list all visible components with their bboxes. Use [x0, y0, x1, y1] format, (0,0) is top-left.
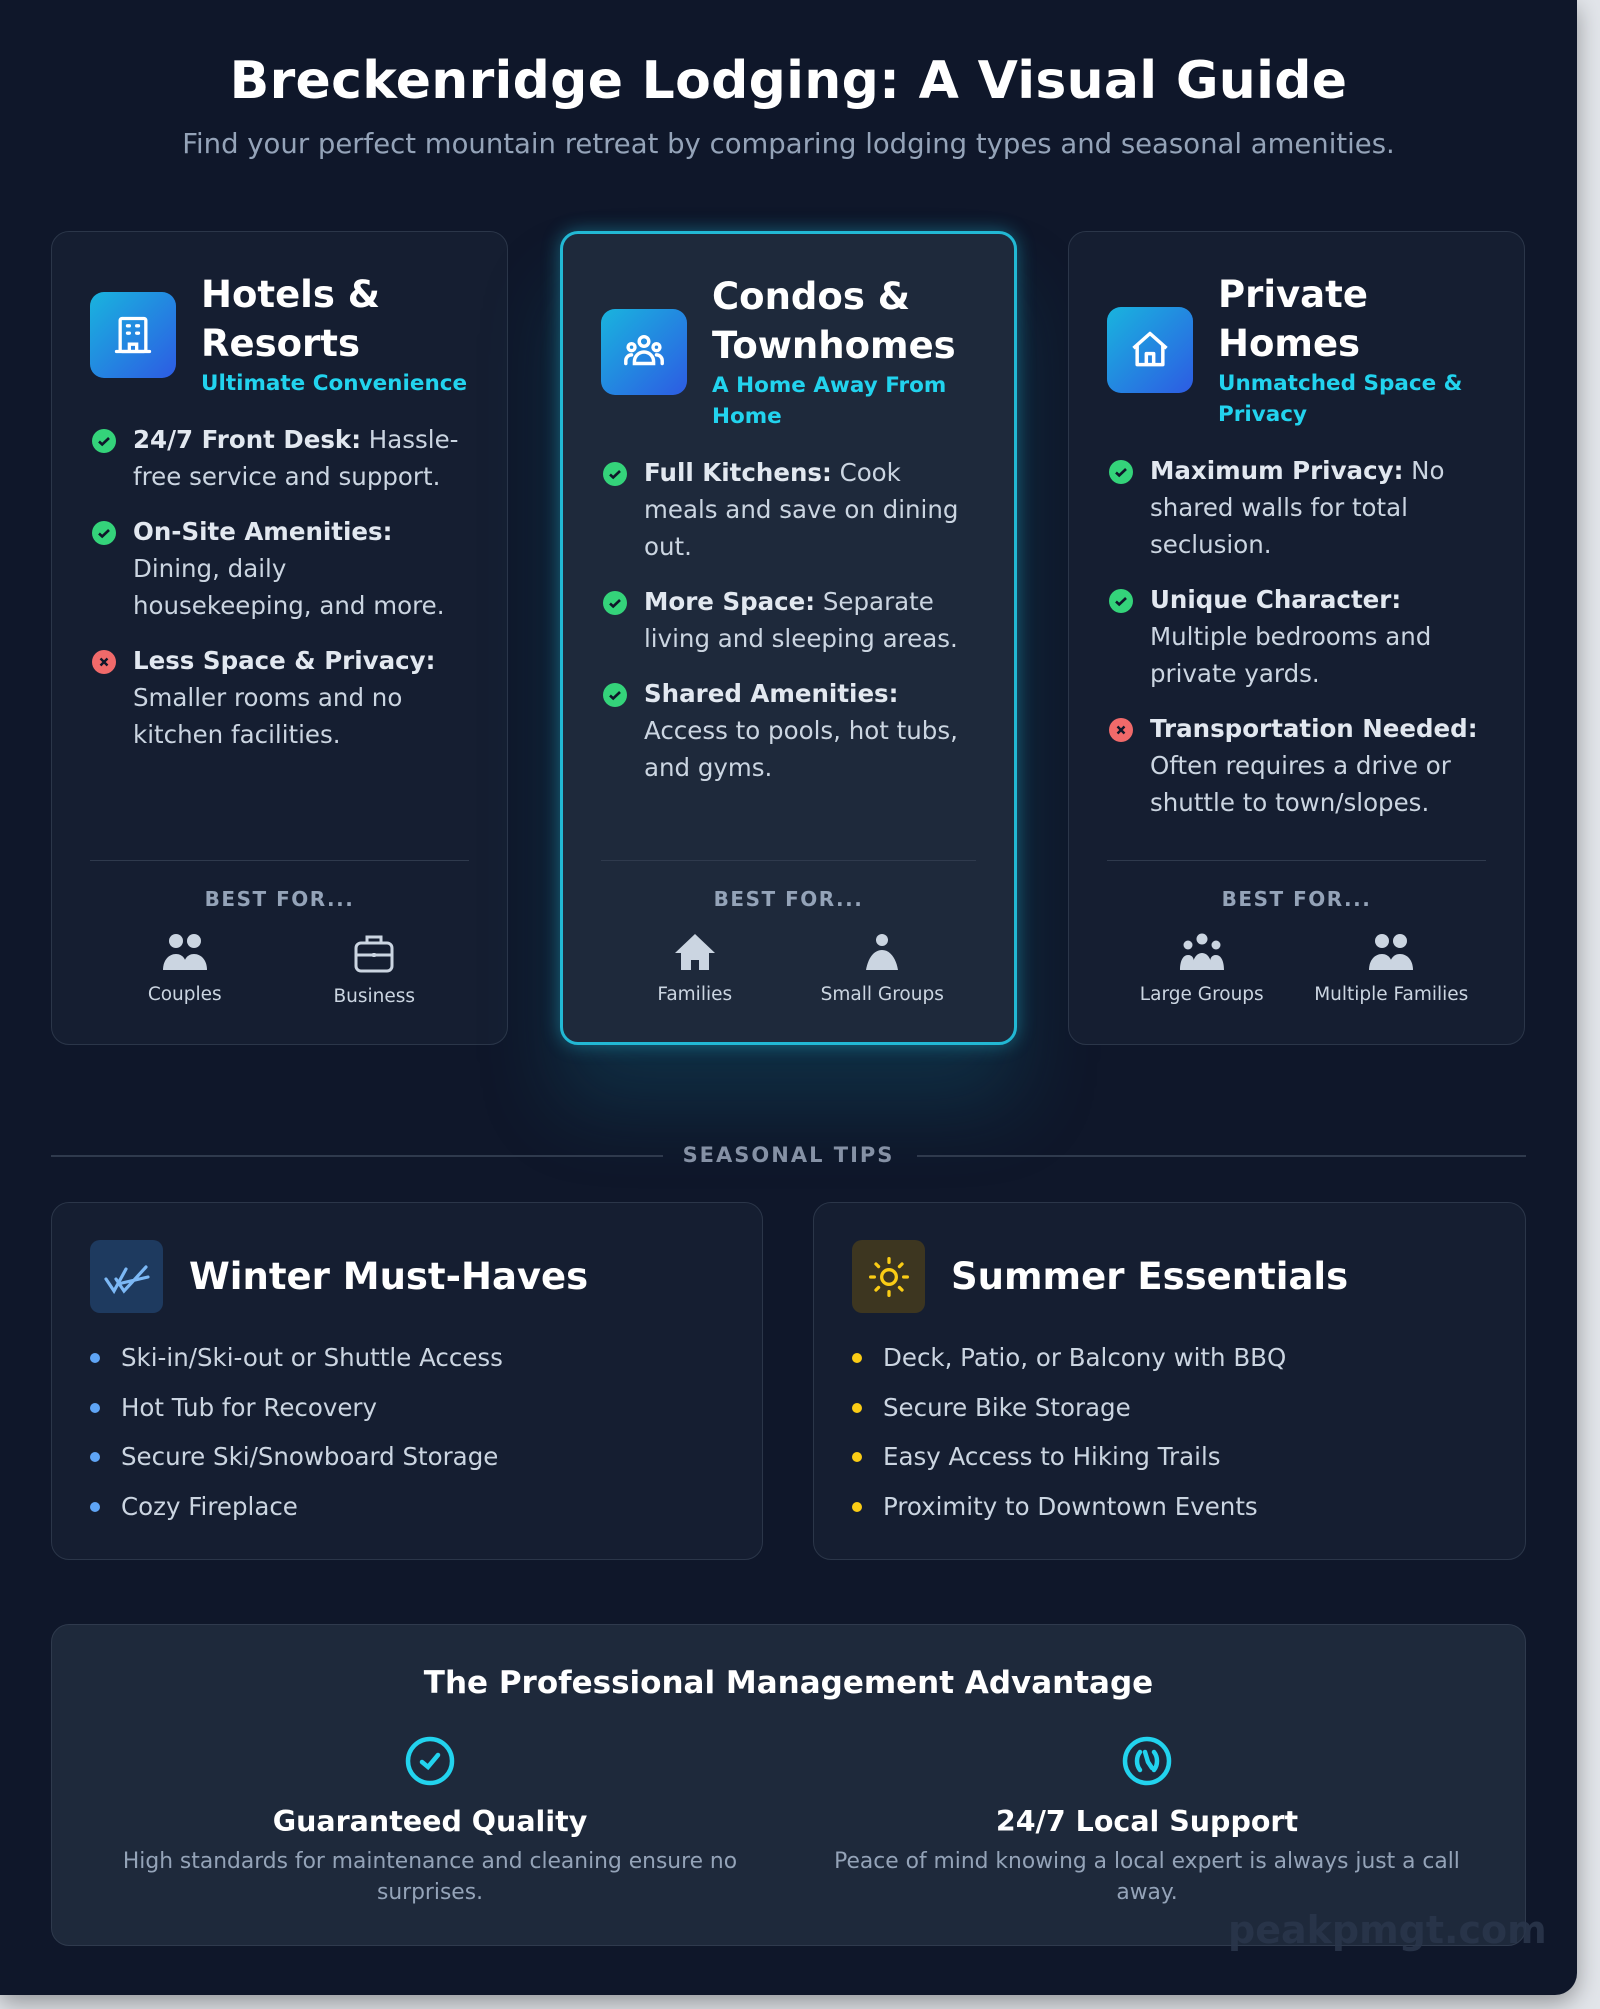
header: private homes: Unmatched Space & — [1218, 371, 1462, 396]
icon: business: Business — [333, 986, 415, 1007]
feature list: hotels — [92, 425, 458, 749]
feature list: condos: Access to pools, hot tubs, and gyms. — [644, 716, 958, 782]
icon: families — [657, 934, 732, 1005]
header: winter — [90, 1240, 588, 1313]
list: summer — [852, 1343, 1286, 1520]
feature list: hotels: Dining, daily — [133, 554, 286, 583]
icon: sun — [852, 1240, 925, 1313]
feature list: private homes: Transportation Needed: Often requires a drive or shuttle to town/slopes. — [1150, 714, 1478, 817]
feature list: condos — [603, 458, 958, 782]
feature list: hotels: housekeeping, and more. — [133, 591, 444, 620]
icon: couples — [148, 934, 222, 1005]
best for: condos: BEST FOR... — [714, 887, 863, 911]
icon: check circle — [406, 1736, 454, 1786]
feature list: private homes: Multiple bedrooms and private yards. — [1150, 622, 1431, 688]
header: winter: Winter Must-Haves — [189, 1255, 588, 1298]
item: guaranteed quality: Guaranteed Quality — [273, 1805, 587, 1838]
list: winter — [90, 1343, 503, 1520]
panel: condos & townhomes — [560, 231, 1017, 1045]
feature list: private homes — [1109, 456, 1478, 817]
header: condos — [601, 275, 956, 429]
header: private homes: Homes — [1218, 322, 1360, 365]
item: 24/7 local support: 24/7 Local Support — [996, 1805, 1298, 1838]
item: 24/7 local support: Peace of mind knowing a local expert is always just a call away. — [834, 1849, 1460, 1905]
header: condos: Townhomes — [712, 324, 956, 367]
icon: small groups: Small Groups — [821, 984, 944, 1005]
header: hotels: Hotels & — [201, 273, 380, 316]
item: guaranteed quality: High standards for maintenance and cleaning ensure no surprises. — [123, 1849, 737, 1905]
icon: large groups — [1140, 934, 1264, 1005]
best for: private homes — [1107, 860, 1486, 1005]
list: winter: Hot Tub for Recovery — [121, 1392, 377, 1422]
header: summer — [852, 1240, 1348, 1313]
watermark: peakpmgt.com — [1228, 1908, 1547, 1952]
panel: professional management advantage — [51, 1624, 1526, 1946]
icon: group — [601, 309, 687, 395]
icon: house — [1107, 307, 1193, 393]
header: private homes — [1107, 273, 1462, 427]
list: winter: Secure Ski/Snowboard Storage — [121, 1442, 498, 1471]
header: hotels — [90, 273, 467, 396]
icon: skis — [90, 1240, 163, 1313]
best for: hotels: BEST FOR... — [205, 887, 354, 911]
icon: small groups — [821, 934, 944, 1005]
header: condos: Home — [712, 404, 782, 429]
section heading: seasonal tips: SEASONAL TIPS — [683, 1143, 894, 1167]
best for: hotels — [90, 860, 469, 1007]
list: summer: Easy Access to Hiking Trails — [883, 1442, 1221, 1471]
header: private homes: Privacy — [1218, 402, 1307, 427]
feature list: condos: Shared Amenities: — [644, 679, 898, 708]
feature list: hotels: 24/7 Front Desk: Hassle-free service and support. — [133, 425, 458, 491]
panel: summer essentials — [813, 1202, 1526, 1560]
feature list: hotels: On-Site Amenities: — [133, 517, 392, 546]
list: winter: Cozy Fireplace — [121, 1492, 298, 1520]
title: Breckenridge Lodging: A Visual Guide — [230, 51, 1347, 111]
feature list: condos: Full Kitchens: Cook — [644, 458, 901, 487]
feature list: condos: meals and save on dining out. — [644, 495, 958, 561]
header: hotels: Resorts — [201, 322, 360, 365]
icon: multiple families — [1314, 934, 1468, 1005]
icon: couples: Couples — [148, 984, 222, 1005]
list: summer: Proximity to Downtown Events — [883, 1492, 1258, 1520]
icon: multiple families: Multiple Families — [1314, 984, 1468, 1005]
feature list: private homes: Maximum Privacy: No shared walls for total seclusion. — [1150, 456, 1444, 559]
icon: families: Families — [657, 984, 732, 1005]
header: condos: Condos & — [712, 275, 910, 318]
icon: business — [333, 936, 415, 1007]
heading: professional management: The Professional Management Advantage — [424, 1665, 1153, 1701]
header: summer: Summer Essentials — [951, 1255, 1348, 1298]
icon: building — [90, 292, 176, 378]
panel: hotels & resorts — [51, 231, 508, 1045]
feature list: private homes: Unique Character: — [1150, 585, 1401, 614]
subtitle: Find your perfect mountain retreat by comparing lodging types and seasonal amenities. — [182, 128, 1395, 160]
panel: winter must-haves — [51, 1202, 763, 1560]
item: guaranteed quality — [123, 1736, 737, 1905]
icon: support — [1122, 1736, 1172, 1786]
best for: private homes: BEST FOR... — [1222, 887, 1371, 911]
best for: condos — [601, 860, 976, 1005]
header: private homes: Private — [1218, 273, 1368, 316]
list: summer: Deck, Patio, or Balcony with BBQ — [883, 1343, 1286, 1372]
header: hotels: Ultimate Convenience — [201, 371, 467, 396]
header: condos: A Home Away From — [712, 373, 946, 398]
item: 24/7 local support — [834, 1736, 1460, 1905]
list: summer: Secure Bike Storage — [883, 1392, 1131, 1422]
panel: private homes — [1068, 231, 1525, 1045]
icon: large groups: Large Groups — [1140, 984, 1264, 1005]
feature list: hotels: Less Space & Privacy: Smaller rooms and no kitchen facilities. — [133, 646, 435, 749]
feature list: condos: More Space: Separate living and sleeping areas. — [644, 587, 958, 653]
list: winter: Ski-in/Ski-out or Shuttle Access — [121, 1343, 503, 1372]
